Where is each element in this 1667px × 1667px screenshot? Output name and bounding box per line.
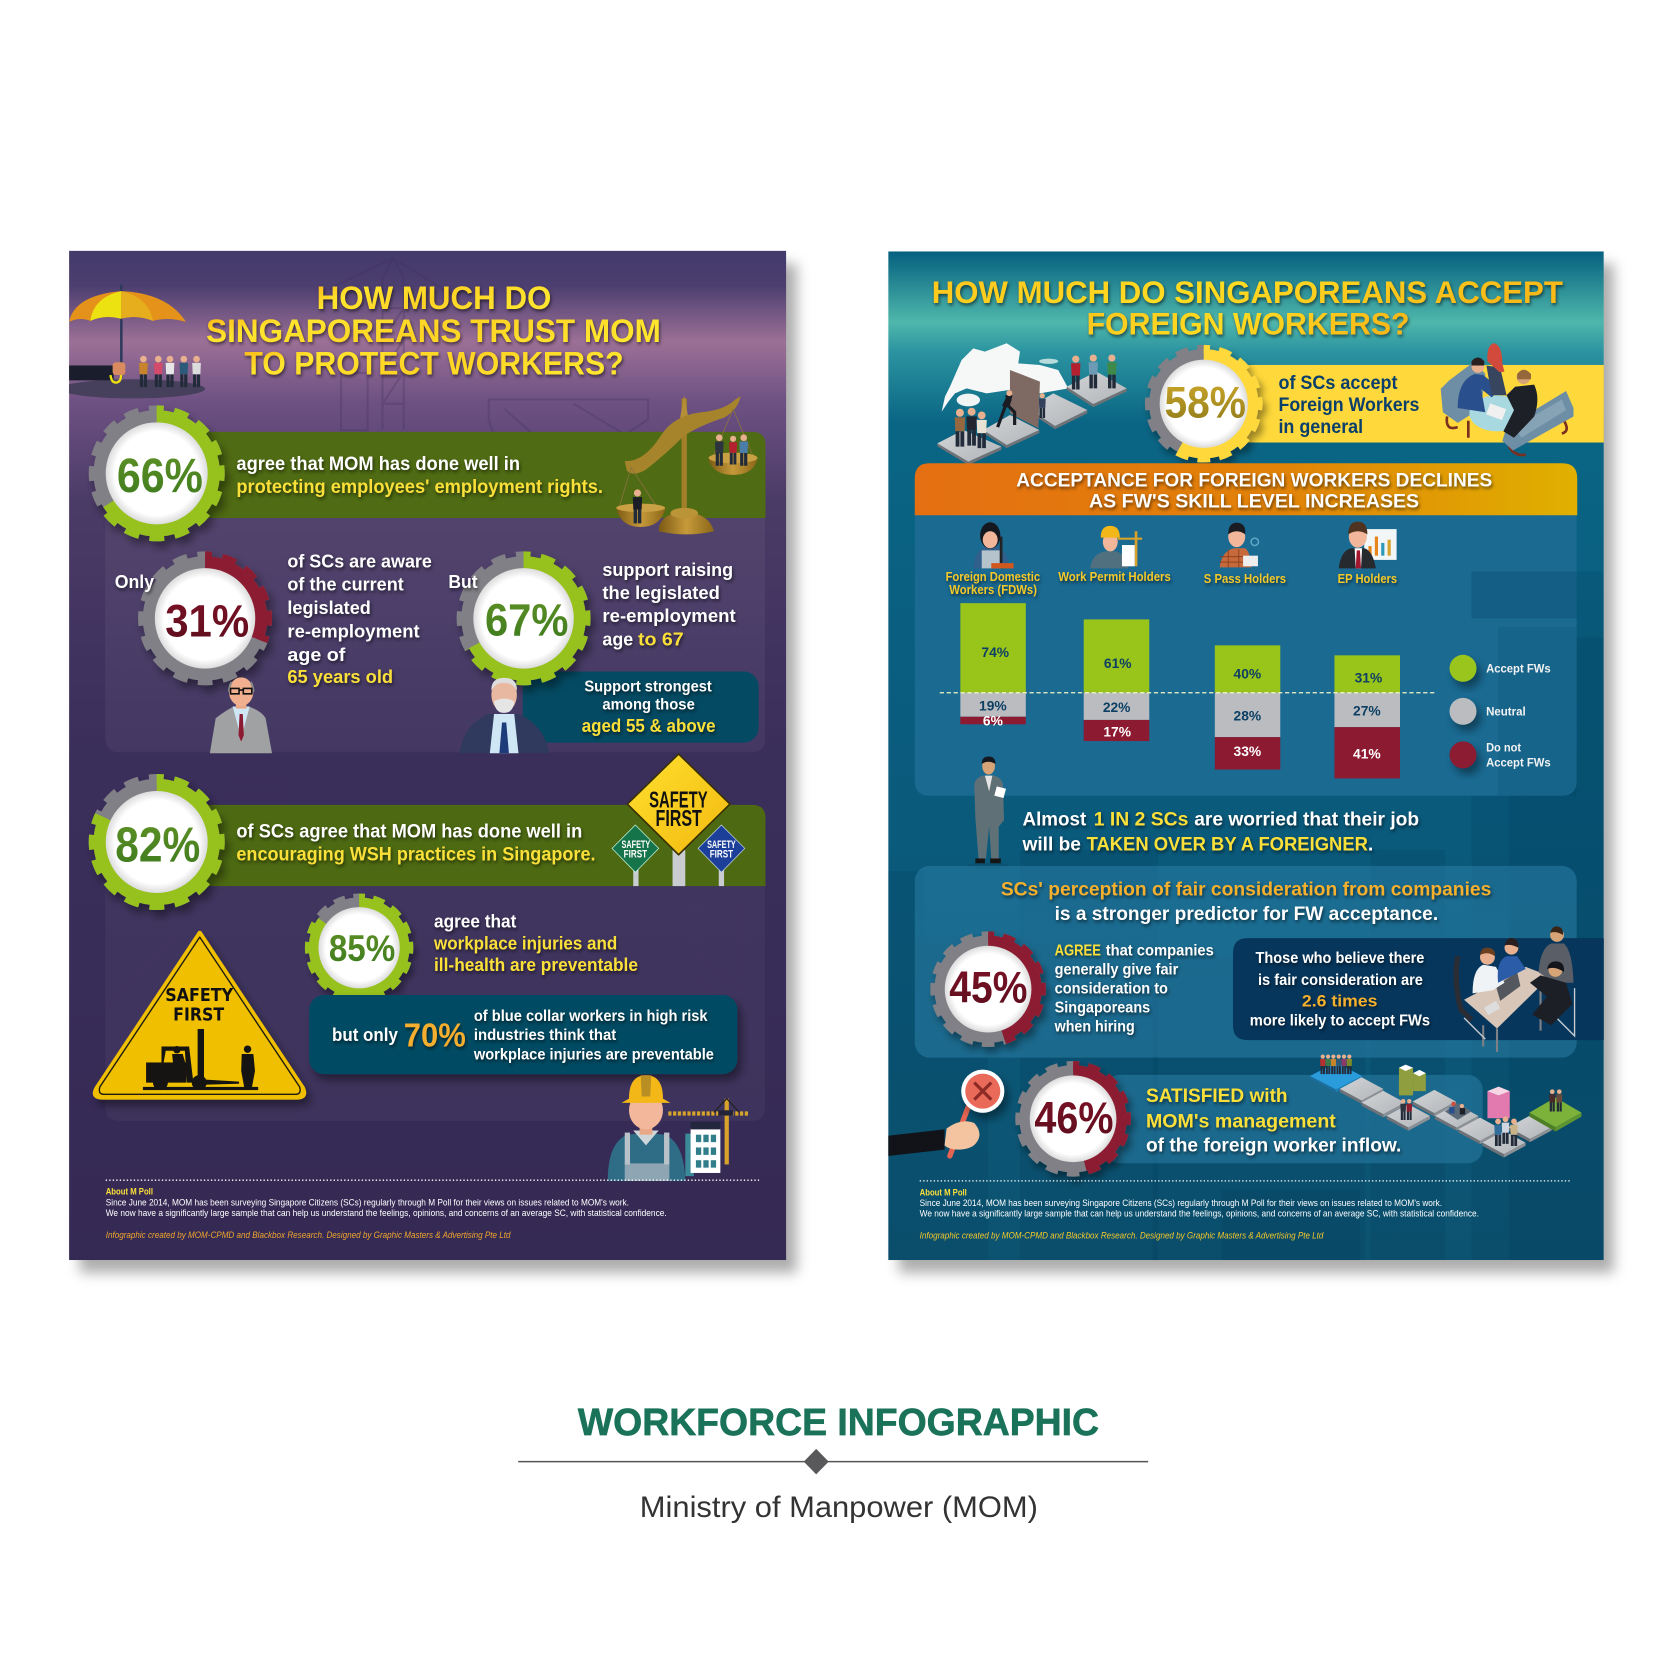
icon: domestic worker (973, 522, 1014, 568)
gear: 31%: 31% (165, 595, 249, 646)
text: aware of re-employment age: re-employment (287, 620, 420, 641)
callout: only 70 percent: 70% (404, 1017, 466, 1054)
icon: safety first signs: SAFETY (622, 839, 651, 851)
text: WSH practices (236, 821, 596, 866)
text: 1 in 2 worried: TAKEN OVER BY A FOREIGNER (1087, 833, 1368, 855)
text: satisfied with management: SATISFIED with (1146, 1085, 1288, 1107)
callout: support strongest: among those (602, 697, 695, 714)
text: employment rights (236, 453, 603, 498)
legend: Accept FWs (1486, 662, 1551, 676)
icon: hand holding X sign (888, 1070, 1004, 1156)
text: workplace injuries preventable: ill-health are preventable (434, 954, 638, 975)
panel: fair consideration (915, 866, 1577, 1058)
stacked bar chart: 33% (1234, 743, 1261, 759)
text: aware of re-employment age: 65 years old (287, 666, 393, 687)
labels: worker categories: Work Permit Holders (1058, 570, 1171, 584)
caption title: WORKFORCE INFOGRAPHIC (578, 1401, 1099, 1444)
divider left (106, 1180, 760, 1181)
gear: 66% (94, 411, 219, 536)
text: 1 in 2 worried: 1 IN 2 SCs (1094, 809, 1188, 831)
text: about M Poll left (106, 1187, 667, 1240)
header: acceptance declines (915, 463, 1577, 515)
gear: 67%: 67% (485, 594, 568, 645)
gear: 85%: 85% (329, 927, 395, 969)
text: support raising age: to 67 (638, 628, 684, 649)
text: support raising age: re-employment (602, 605, 736, 626)
panel: chart (915, 514, 1577, 796)
gear: 58% (1150, 350, 1258, 458)
text: accept foreign workers: in general (1278, 417, 1363, 438)
callout: support strongest (523, 671, 759, 743)
icon: safety first triangle with forklift: FIRST (173, 1004, 225, 1025)
text: support raising age (602, 559, 736, 649)
callout: only 70 percent (309, 995, 737, 1074)
stacked bar chart: 19% (979, 697, 1007, 713)
illustration: umbrella over workers (61, 285, 205, 398)
band: WSH practices (202, 805, 766, 886)
icon: safety first signs: FIRST (624, 848, 647, 860)
illustration: Singapore map with door and tiles (937, 343, 1127, 465)
text: workplace injuries preventable (433, 911, 638, 975)
text: about M Poll left: About M Poll (106, 1187, 153, 1197)
labels: worker categories: Workers (FDWs) (949, 583, 1037, 597)
heading: fair consideration: is a stronger predictor for FW acceptance. (1055, 903, 1438, 925)
text: aware of re-employment age (287, 550, 432, 687)
text: employment rights: agree that MOM has done well in (236, 453, 520, 475)
title: FOREIGN WORKERS? (1087, 306, 1410, 342)
panel: WSH details (105, 886, 765, 1121)
stacked bar chart: 17% (1103, 723, 1131, 739)
text: support raising age: the legislated (602, 582, 720, 603)
text: 1 in 2 worried: are worried that their job (1194, 809, 1419, 831)
labels: worker categories: Foreign Domestic (946, 570, 1040, 584)
label: Only: Only (115, 571, 155, 592)
callout: only 70 percent: industries think that (474, 1027, 617, 1044)
icon: safety first signs: FIRST (656, 805, 702, 831)
header: acceptance declines: AS FW'S SKILL LEVEL INCREASES (1089, 490, 1419, 512)
text: workplace injuries preventable: agree that (434, 911, 516, 932)
icon: safety first triangle with forklift: SAFETY (165, 985, 234, 1006)
text: 1 in 2 worried: Almost (1023, 809, 1087, 831)
icon: senior man with beard (460, 678, 549, 753)
text: agree companies fair: consideration to (1055, 981, 1168, 998)
poster: accept foreign workers (888, 251, 1604, 1260)
panel: satisfied band (1105, 1075, 1483, 1163)
text: agree companies fair: that companies (1106, 943, 1214, 960)
heading: fair consideration: SCs' perception of fair consideration from companies (1001, 879, 1491, 901)
text: agree companies fair: generally give fair (1055, 962, 1178, 979)
title (206, 280, 661, 382)
text: agree companies fair: AGREE (1055, 943, 1101, 960)
gear: 46%: 46% (1034, 1094, 1113, 1143)
title: TO PROTECT WORKERS? (244, 346, 624, 382)
text: agree companies fair (1054, 943, 1214, 1036)
text: satisfied with management: of the foreign worker inflow. (1146, 1135, 1401, 1157)
text: about M Poll right: About M Poll (920, 1188, 967, 1198)
band: 58 percent accept (1243, 365, 1604, 443)
text: 1 in 2 worried (1022, 809, 1419, 855)
callout: 2.6 times (1233, 938, 1604, 1040)
text: WSH practices: encouraging WSH practices in Singapore. (236, 844, 596, 866)
text: 1 in 2 worried: will be (1022, 833, 1081, 855)
text: about M Poll left: We now have a significantly large sample that can help us understand the feelings, opinions, and concerns of an average SC, with statistical confidence. (106, 1208, 667, 1218)
gear: 46% (1020, 1065, 1126, 1172)
callout: only 70 percent: but only (332, 1024, 398, 1045)
icon: safety first signs: SAFETY (707, 839, 736, 851)
poster shadow left (80, 263, 797, 1273)
text: support raising age: age (602, 628, 633, 649)
text: accept foreign workers: of SCs accept (1278, 373, 1398, 394)
text: workplace injuries preventable: workplace injuries and (433, 932, 617, 953)
icon: safety first signs: SAFETY (649, 786, 708, 812)
panel: employment rights details (105, 517, 765, 752)
illustration: office meeting (1456, 926, 1575, 1052)
gear: 58%: 58% (1164, 379, 1246, 428)
icon: worried man standing (967, 756, 1009, 869)
labels: worker categories (946, 570, 1397, 597)
stacked bar chart (940, 603, 1435, 778)
callout: 2.6 times: 2.6 times (1302, 992, 1377, 1011)
icon: safety first triangle with forklift (95, 933, 304, 1098)
divider right (920, 1180, 1571, 1182)
text: accept foreign workers: Foreign Workers (1278, 395, 1419, 416)
text: satisfied with management: MOM's management (1146, 1110, 1336, 1132)
callout: only 70 percent: of blue collar workers in high risk (474, 1008, 708, 1025)
text: aware of re-employment age: of the current (287, 574, 404, 595)
gear: 31% (143, 557, 267, 680)
text: about M Poll right (920, 1188, 1479, 1240)
callout: 2.6 times: is fair consideration are (1258, 972, 1423, 989)
title: SINGAPOREANS TRUST MOM (206, 313, 661, 349)
text: support raising age: support raising (602, 559, 733, 580)
text: WSH practices: of SCs agree that MOM has done well in (236, 821, 582, 843)
text: 1 in 2 worried: . (1368, 833, 1373, 855)
stacked bar chart: 61% (1104, 655, 1132, 671)
text: agree companies fair: Singaporeans (1055, 1000, 1150, 1017)
gear: 67% (462, 557, 585, 680)
poster: trust MOM to protect workers (61, 251, 786, 1260)
icon: EP holder (1339, 522, 1397, 568)
text: satisfied with management (1146, 1085, 1401, 1157)
icon: scales of justice (616, 395, 758, 534)
stacked bar chart: 28% (1234, 707, 1261, 723)
text: about M Poll right: Since June 2014, MOM has been surveying Singapore Citizens (SCs) regularly through M Poll for their views on issues related to MOM's work. (920, 1198, 1442, 1208)
text: about M Poll right: Infographic created by MOM-CPMD and Blackbox Research. Designed by Graphic Masters & Advertising Pte Ltd (920, 1230, 1324, 1240)
callout: support strongest: aged 55 & above (582, 716, 716, 736)
stacked bar chart: 22% (1103, 699, 1130, 715)
label: But: But (448, 571, 478, 592)
legend (1450, 655, 1551, 769)
stacked bar chart: 41% (1353, 746, 1381, 762)
stacked bar chart: 6% (983, 713, 1003, 729)
title: HOW MUCH DO SINGAPOREANS ACCEPT (932, 274, 1563, 310)
text: about M Poll left: Infographic created by MOM-CPMD and Blackbox Research. Designed by Graphic Masters & Advertising Pte Ltd (106, 1230, 512, 1240)
gear: 66%: 66% (117, 450, 203, 503)
text: aware of re-employment age: of SCs are aware (287, 550, 432, 571)
text: employment rights: protecting employees' employment rights. (236, 476, 603, 498)
gear: 85% (309, 898, 409, 998)
icon: safety first signs: FIRST (710, 848, 733, 860)
gear: 45% (935, 936, 1041, 1042)
icon: work permit holder (1090, 526, 1142, 568)
callout: only 70 percent: workplace injuries are preventable (473, 1046, 714, 1063)
illustration: isometric path of tiles (1310, 1055, 1581, 1157)
heading: fair consideration (1001, 879, 1491, 925)
text: agree companies fair: when hiring (1054, 1019, 1135, 1036)
header: acceptance declines: ACCEPTANCE FOR FOREIGN WORKERS DECLINES (1016, 470, 1492, 492)
text: aware of re-employment age: legislated (287, 597, 371, 618)
callout: 2.6 times: Those who believe there (1256, 950, 1424, 967)
gear: 82%: 82% (115, 819, 200, 873)
text: about M Poll right: We now have a significantly large sample that can help us understand the feelings, opinions, and concerns of an average SC, with statistical confidence. (920, 1209, 1479, 1219)
title: HOW MUCH DO (317, 280, 551, 316)
legend: Neutral (1486, 705, 1526, 719)
icon: bald man with glasses (210, 677, 272, 753)
icon: safety first signs (612, 754, 745, 886)
illustration: business meeting on sofas (1441, 343, 1574, 455)
labels: worker categories: S Pass Holders (1204, 572, 1286, 586)
callout: support strongest: Support strongest (584, 679, 712, 696)
gear: 82% (94, 779, 219, 905)
stacked bar chart: 31% (1355, 670, 1382, 686)
gear: 45%: 45% (949, 963, 1027, 1012)
text: accept foreign workers (1278, 373, 1419, 438)
text: about M Poll left: Since June 2014, MOM has been surveying Singapore Citizens (SCs) regularly through M Poll for their views on issues related to MOM's work. (106, 1197, 629, 1207)
callout: 2.6 times: more likely to accept FWs (1250, 1013, 1430, 1030)
icon: construction worker with crane (608, 1075, 748, 1181)
stacked bar chart: 40% (1234, 665, 1261, 681)
band: employment rights (202, 432, 766, 518)
icon: S Pass holder (1220, 523, 1258, 567)
title (932, 281, 1566, 339)
text: aware of re-employment age: age of (287, 644, 346, 665)
legend: Accept FWs (1486, 755, 1551, 769)
stacked bar chart: 27% (1353, 703, 1381, 719)
stacked bar chart: 74% (981, 644, 1009, 660)
labels: worker categories: EP Holders (1338, 572, 1397, 586)
caption subtitle: Ministry of Manpower (MOM) (640, 1492, 1038, 1524)
caption divider with diamond (518, 1449, 1148, 1474)
poster shadow right (899, 263, 1614, 1273)
legend: Do not (1486, 740, 1521, 754)
